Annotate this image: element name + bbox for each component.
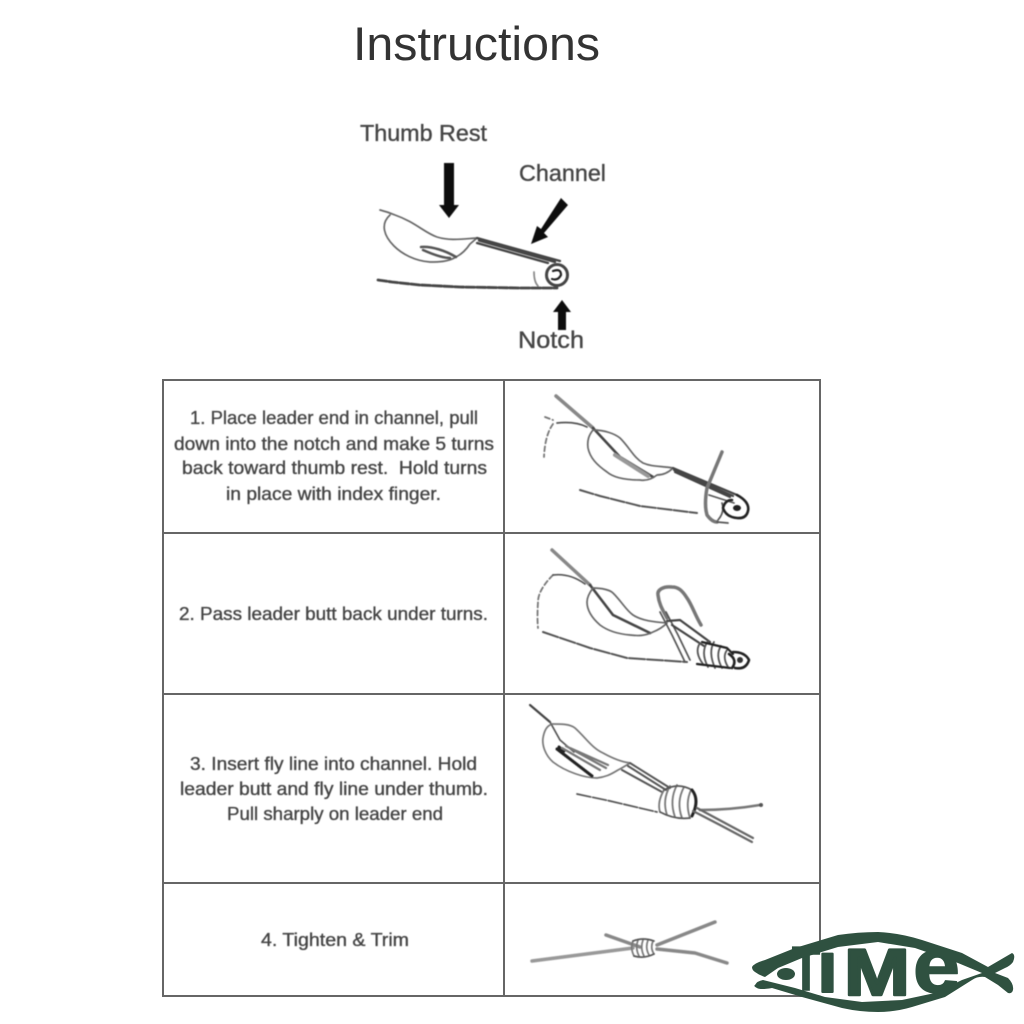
logo eye	[777, 968, 795, 980]
logo wordmark: e	[913, 921, 960, 1009]
step 2 text: 2. Pass leader butt back under turns.	[179, 604, 488, 624]
logo wordmark	[792, 921, 960, 1009]
arrow: thumb rest	[439, 163, 459, 218]
icon: thumb with tool	[378, 210, 568, 288]
logo interior	[765, 942, 982, 1002]
step 1 text: 1. Place leader end in channel, pull	[190, 408, 478, 428]
arrow: notch	[553, 300, 571, 330]
step 1 illustration	[544, 396, 748, 523]
diagram: nail knot tool parts	[360, 120, 606, 354]
step 2 illustration	[538, 550, 749, 668]
logo: TIME fish	[752, 921, 1014, 1012]
label: Thumb Rest: Thumb Rest	[360, 120, 488, 146]
step 3 text: leader butt and fly line under thumb.	[180, 779, 488, 799]
logo wordmark: M	[844, 935, 910, 1009]
step 1 text: down into the notch and make 5 turns	[174, 434, 494, 454]
step 1 text: in place with index finger.	[226, 484, 441, 504]
step 1 text	[174, 408, 494, 504]
step 3 text	[180, 754, 488, 824]
table	[163, 380, 820, 996]
arrow: channel	[531, 198, 568, 244]
logo body	[752, 932, 1014, 1012]
step 3 illustration	[530, 705, 763, 842]
step 3 text: 3. Insert fly line into channel. Hold	[190, 754, 477, 774]
title: Instructions	[353, 17, 600, 70]
step 4 illustration	[532, 922, 727, 963]
step 1 text: back toward thumb rest. Hold turns	[182, 458, 487, 478]
step 4 text: 4. Tighten & Trim	[261, 930, 409, 950]
label: Channel: Channel	[519, 160, 606, 186]
label: Notch: Notch	[518, 327, 584, 354]
logo wordmark: I	[818, 941, 837, 1004]
logo wordmark: T	[792, 935, 820, 1004]
step 3 text: Pull sharply on leader end	[227, 804, 443, 824]
